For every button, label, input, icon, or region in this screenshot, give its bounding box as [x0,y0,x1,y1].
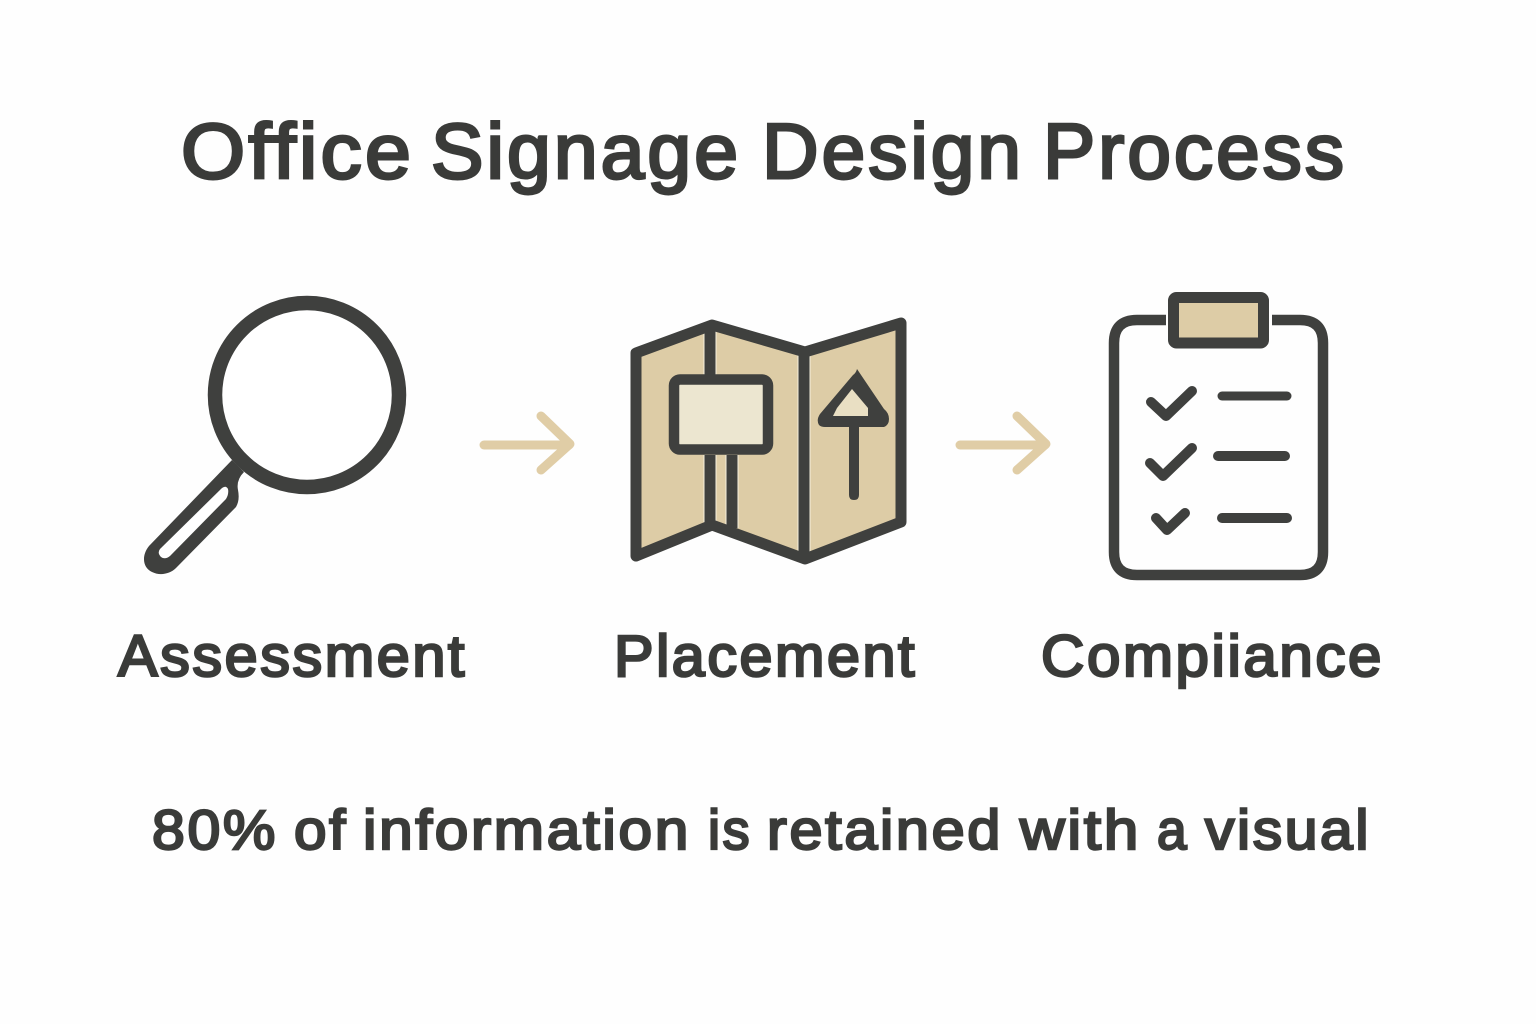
title: Design [762,107,1024,195]
icon: clipboard checklist [1114,298,1323,575]
label: compliance: Compiiance [1041,624,1384,689]
statistic caption: information [363,798,691,861]
label: assessment: Assessment [118,624,467,689]
statistic caption: retained [767,798,1003,861]
statistic caption: 80% [152,798,278,861]
label: placement: Placement [614,624,917,689]
icon: magnifying glass [144,303,399,574]
statistic caption [152,798,1371,861]
icon: folded map with sign [636,323,901,559]
statistic caption: is [708,798,752,861]
arrow: placement to compliance [960,416,1046,470]
statistic caption: with [1019,798,1141,861]
arrow: assessment to placement [484,416,570,470]
title: Process [1043,107,1347,195]
statistic caption: a [1157,798,1189,861]
title [181,107,1347,195]
statistic caption: visual [1205,798,1371,861]
title: Signage [431,107,741,195]
statistic caption: of [294,798,348,861]
title: Office [181,107,414,195]
